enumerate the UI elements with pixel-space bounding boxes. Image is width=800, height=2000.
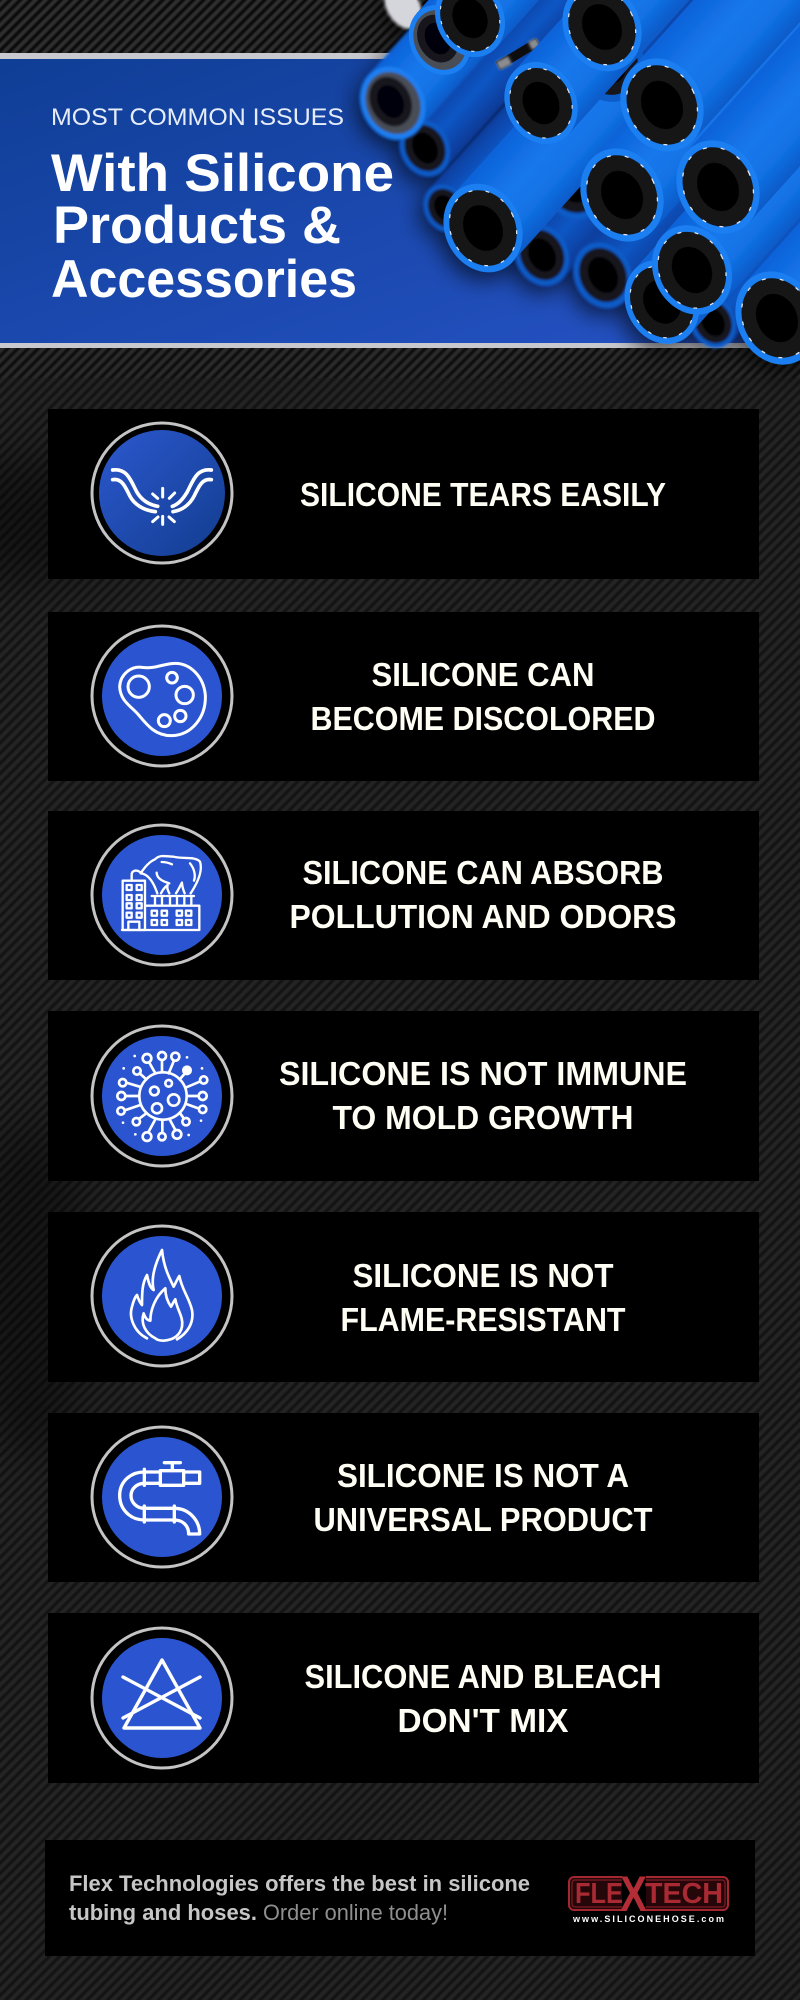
panel: silicone is not flame-resistant (48, 1212, 759, 1382)
icon: factory with smoke (92, 825, 232, 965)
label: UNIVERSAL PRODUCT (314, 1501, 652, 1538)
title block (51, 104, 394, 309)
call to action text (69, 1871, 530, 1925)
label (314, 1457, 652, 1538)
panel: silicone can absorb pollution and odors (48, 811, 759, 980)
icon: stained blob (92, 626, 232, 766)
hero image: bundle of blue silicone tubes (330, 0, 800, 399)
label: DON'T MIX (398, 1702, 568, 1739)
main heading: Accessories (51, 250, 357, 309)
call to action text: tubing and hoses. (69, 1900, 257, 1925)
main heading (51, 144, 394, 309)
call to action text: Order online today! (263, 1900, 448, 1925)
label: SILICONE CAN (372, 656, 594, 693)
label: BECOME DISCOLORED (310, 700, 656, 737)
icon: pipe with valve (92, 1427, 232, 1567)
label (304, 1658, 662, 1739)
main heading: With Silicone (51, 144, 394, 203)
label (340, 1257, 626, 1338)
label: SILICONE IS NOT (352, 1257, 614, 1294)
footer panel (45, 1840, 755, 1956)
logo: Flextech: X (620, 1866, 647, 1922)
panel: silicone can become discolored (48, 612, 759, 781)
label (279, 1055, 687, 1136)
logo: Flextech: www.SILICONEHOSE.com (572, 1914, 724, 1924)
label: POLLUTION AND ODORS (290, 898, 676, 935)
icon: flame (92, 1226, 232, 1366)
logo: Flextech: FLE (575, 1878, 623, 1910)
header banner (0, 53, 800, 348)
icon: no bleach triangle (92, 1628, 232, 1768)
panel: silicone is not immune to mold growth (48, 1011, 759, 1181)
label (310, 656, 656, 737)
logo: Flextech (569, 1866, 728, 1924)
call to action text: Flex Technologies offers the best in silicone (69, 1871, 530, 1896)
eyebrow heading: MOST COMMON ISSUES (51, 104, 344, 131)
label: SILICONE IS NOT A (337, 1457, 629, 1494)
icon: torn tube (92, 423, 232, 563)
label: SILICONE IS NOT IMMUNE (279, 1055, 687, 1092)
panel: silicone is not a universal product (48, 1413, 759, 1582)
main heading: Products & (53, 196, 341, 255)
label: SILICONE TEARS EASILY (300, 476, 666, 513)
panel: silicone and bleach don't mix (48, 1613, 759, 1783)
label: SILICONE AND BLEACH (304, 1658, 662, 1695)
panel: silicone tears easily (48, 409, 759, 579)
label (290, 854, 676, 935)
icon: mold spore (92, 1026, 232, 1166)
label: TO MOLD GROWTH (332, 1099, 634, 1136)
label: SILICONE CAN ABSORB (302, 854, 664, 891)
label: FLAME-RESISTANT (340, 1301, 626, 1338)
logo: Flextech: TECH (645, 1878, 723, 1910)
